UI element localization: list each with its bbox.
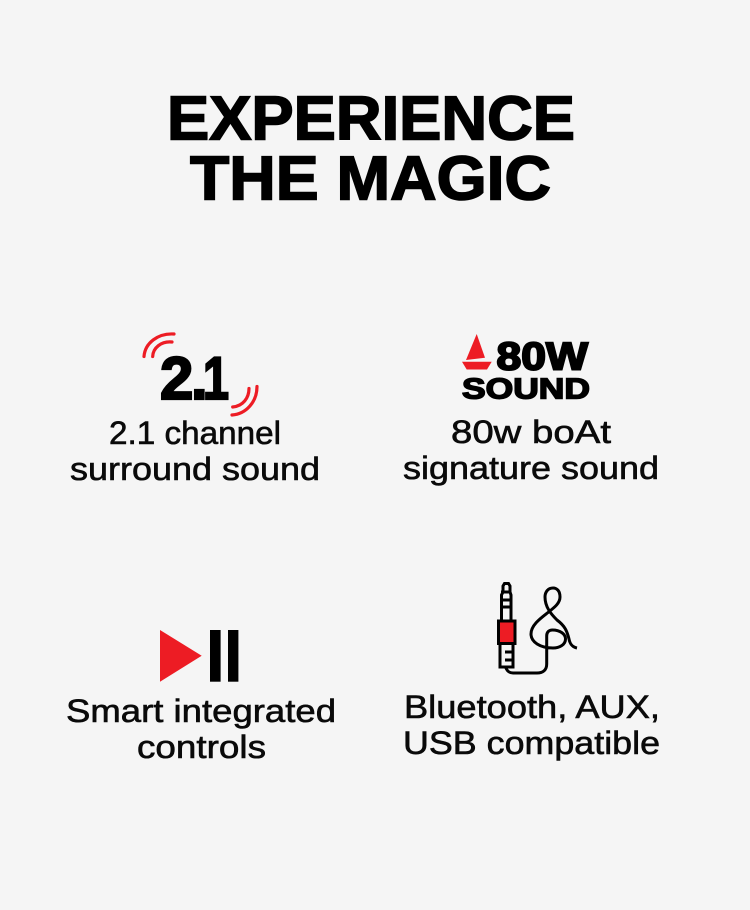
title: EXPERIENCE bbox=[167, 84, 575, 154]
icon: play and pause bbox=[160, 630, 238, 682]
text: 2.1 channel surround sound: surround sound bbox=[70, 451, 320, 487]
text: smart integrated controls bbox=[66, 693, 336, 765]
icon: 2.1 with red sound waves: 2 bbox=[160, 345, 193, 412]
panel: Bluetooth AUX USB compatible bbox=[403, 584, 660, 761]
icon: boat logo with 80W SOUND: 80W bbox=[496, 336, 588, 378]
text: smart integrated controls: Smart integrated bbox=[66, 693, 336, 729]
text: 80w boAt signature sound: 80w boAt bbox=[451, 414, 611, 450]
icon: audio jack with treble clef cable bbox=[498, 584, 577, 673]
text: Bluetooth AUX USB compatible: Bluetooth, AUX, bbox=[404, 689, 660, 725]
text: 2.1 channel surround sound: 2.1 channel bbox=[109, 415, 281, 451]
text: Bluetooth AUX USB compatible: USB compatible bbox=[403, 725, 660, 761]
panel: smart integrated controls bbox=[66, 630, 336, 765]
icon: boat logo with 80W SOUND bbox=[462, 334, 590, 406]
text: smart integrated controls: controls bbox=[137, 729, 266, 765]
text: 80w boAt signature sound bbox=[403, 414, 659, 486]
icon: 2.1 with red sound waves bbox=[144, 334, 257, 415]
title bbox=[167, 84, 575, 214]
panel: 80W boAt signature sound bbox=[403, 334, 659, 486]
text: 80w boAt signature sound: signature sound bbox=[403, 450, 659, 486]
icon: 2.1 with red sound waves: 1 bbox=[203, 345, 229, 412]
icon: boat logo with 80W SOUND: SOUND bbox=[462, 374, 590, 406]
text: Bluetooth AUX USB compatible bbox=[403, 689, 660, 761]
icon: 2.1 with red sound waves: . bbox=[191, 345, 208, 412]
title: THE MAGIC bbox=[190, 144, 551, 214]
text: 2.1 channel surround sound bbox=[70, 415, 320, 487]
panel: 2.1 channel surround sound bbox=[70, 334, 320, 487]
